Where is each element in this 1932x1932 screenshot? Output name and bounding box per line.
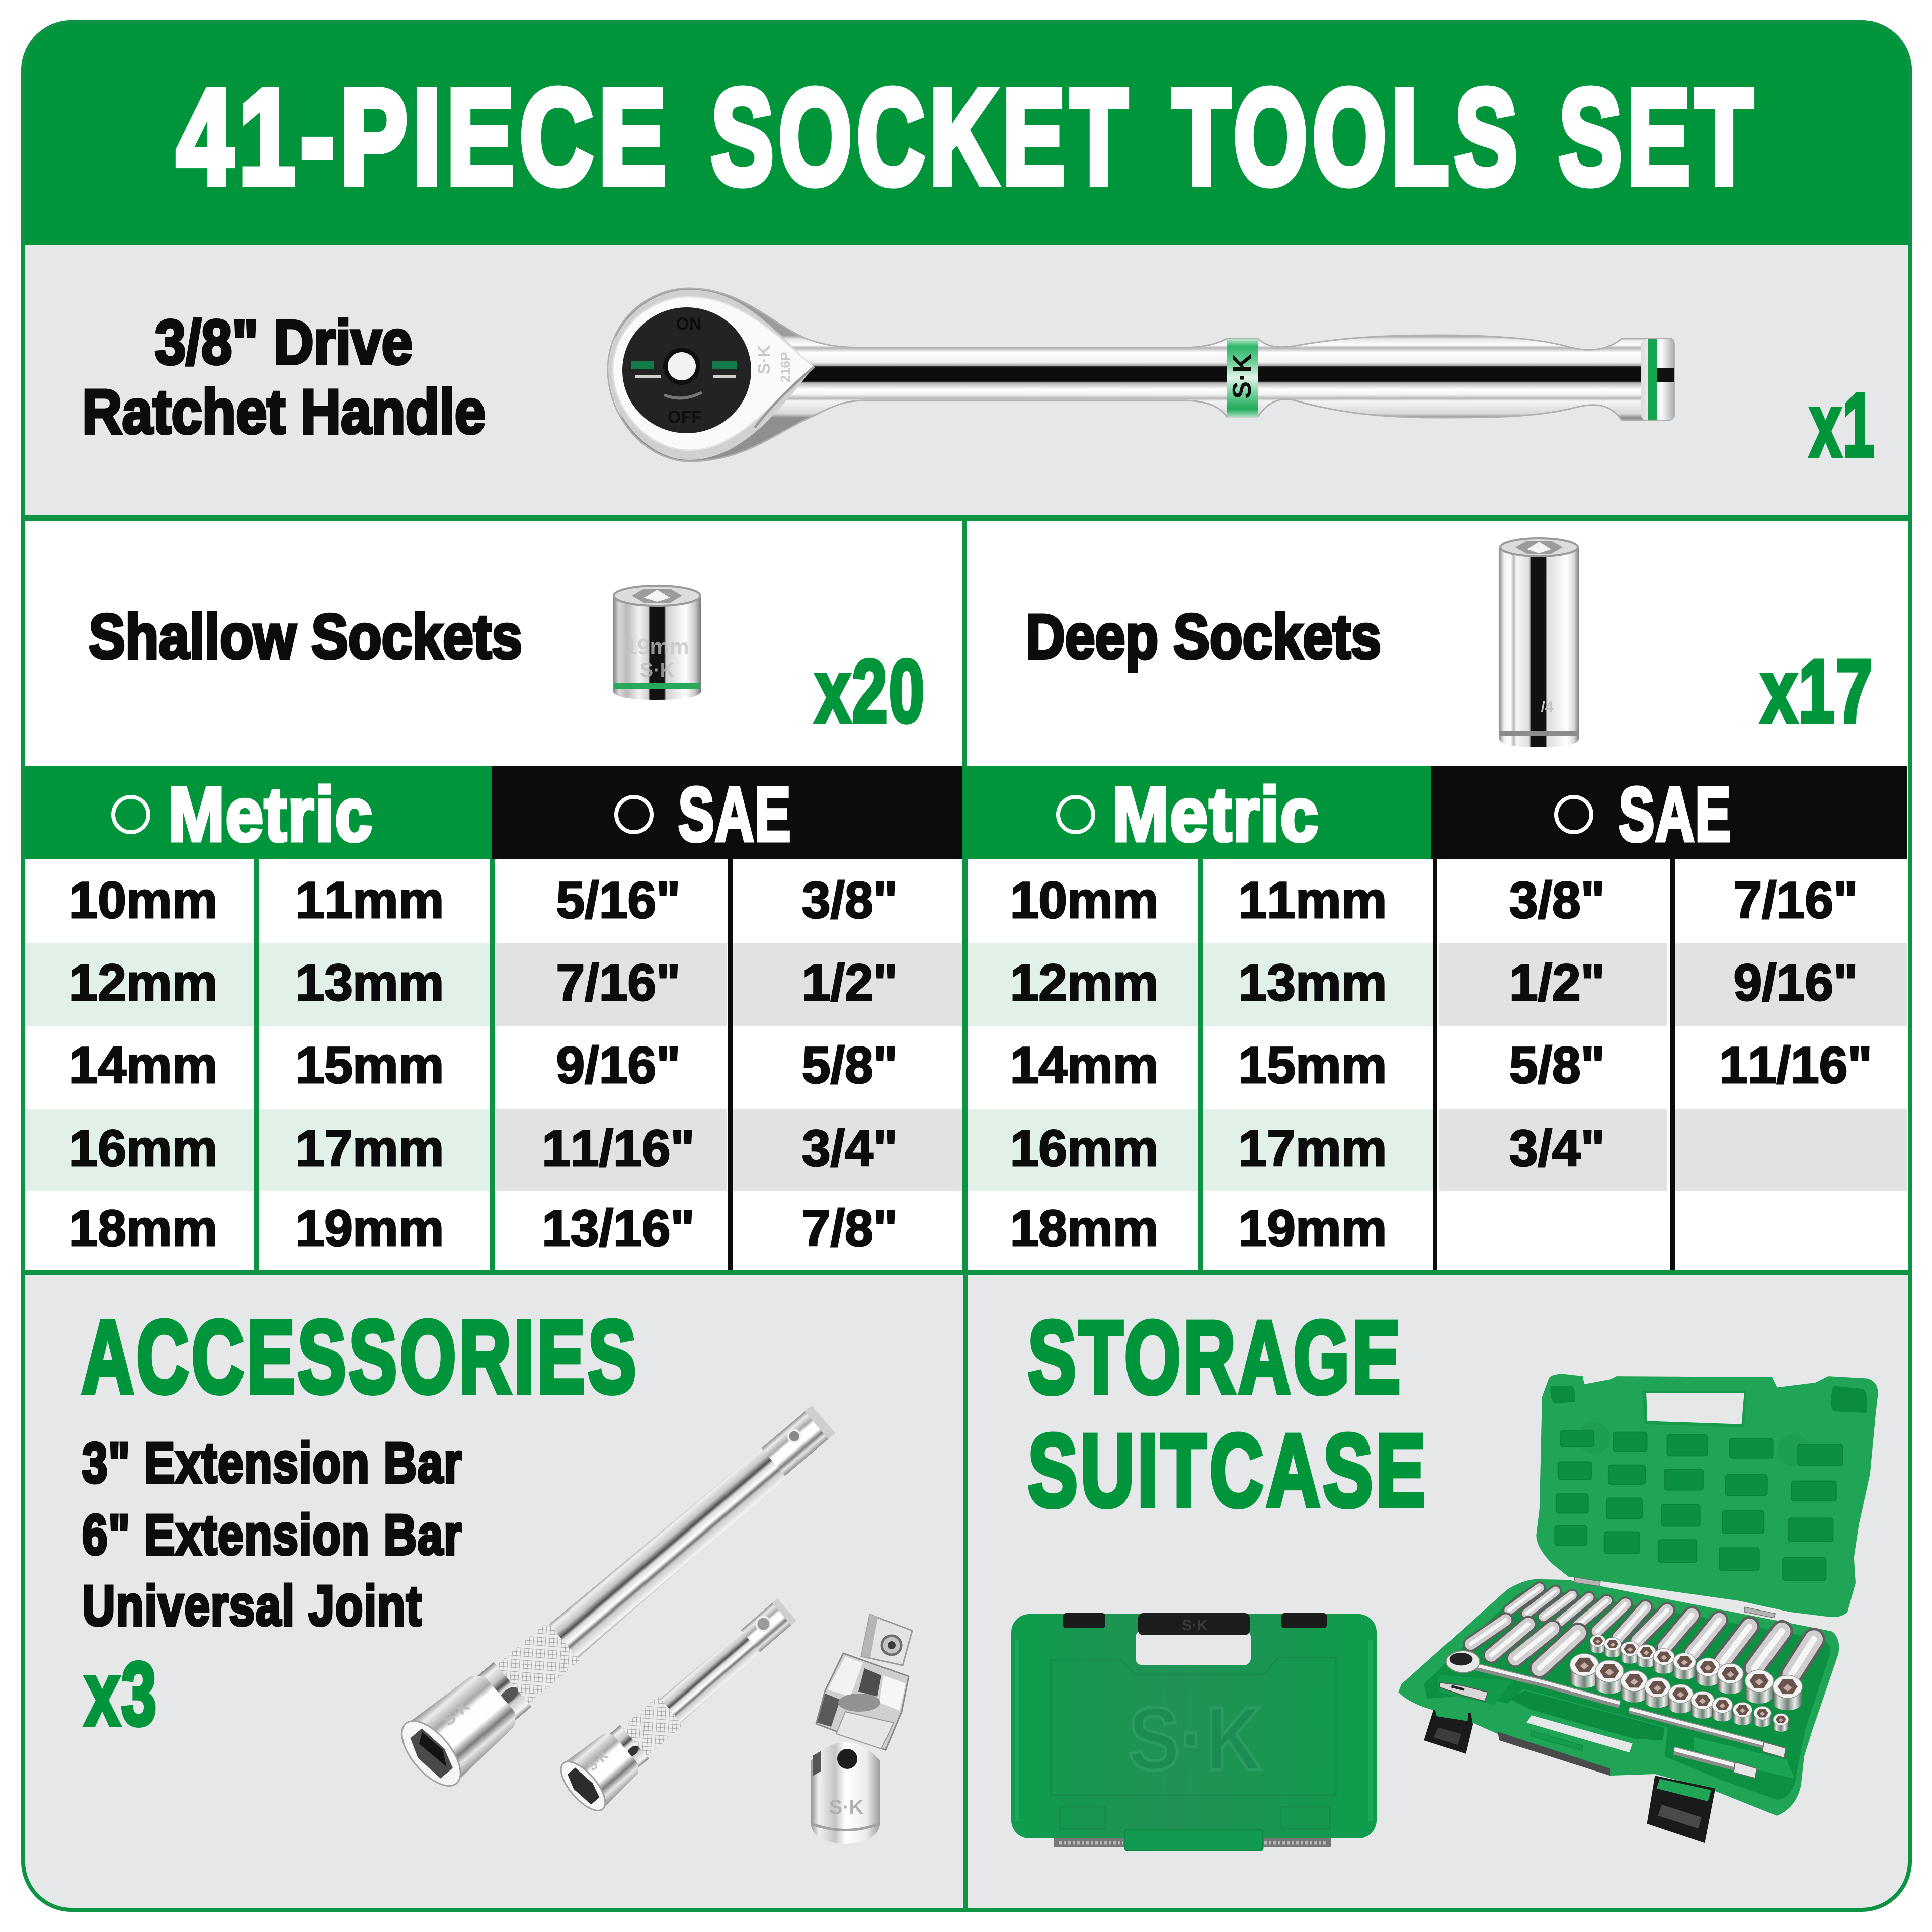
- icon: universal joint: S·K: [829, 1796, 864, 1818]
- quantity: x17: x17: [1761, 641, 1874, 741]
- icon: deep socket: /4: [1541, 699, 1554, 715]
- divider between accessories and storage: [963, 1275, 968, 1910]
- extension bar in case: [1674, 1749, 1757, 1778]
- icon: ratchet handle: 216P: [778, 352, 793, 382]
- table values: deep metric: 14mm: [1010, 1036, 1158, 1094]
- table values: deep metric: 15mm: [1239, 1036, 1387, 1094]
- table values: shallow SAE: 7/8": [802, 1199, 898, 1257]
- icon: 3 inch extension bar: S·K: [584, 1748, 611, 1774]
- panel: shallow sockets header: [89, 586, 926, 741]
- table values: shallow metric: 15mm: [296, 1036, 444, 1094]
- green rule under ratchet panel: [21, 515, 1912, 521]
- table values: deep SAE: 3/4": [1509, 1119, 1605, 1177]
- panel: deep sockets header: [1026, 538, 1874, 747]
- black latch right: [1647, 1776, 1715, 1843]
- title: SET: [1559, 61, 1758, 213]
- table column dividers: [21, 859, 1912, 1275]
- table header: shallow metric: [21, 766, 492, 859]
- title: SOCKET: [711, 61, 1133, 213]
- heading: ratchet handle: Ratchet Handle: [82, 377, 486, 447]
- icon: ratchet handle: [608, 288, 1674, 461]
- table values: deep metric: 17mm: [1239, 1119, 1387, 1177]
- title: [177, 61, 1758, 213]
- table values: shallow metric: 12mm: [69, 954, 217, 1011]
- table values: deep metric: 18mm: [1010, 1199, 1158, 1257]
- icon: shallow socket: 19mm: [625, 634, 689, 659]
- vertical divider between sockets: [962, 521, 967, 766]
- heading: deep sockets: Deep Sockets: [1026, 602, 1381, 672]
- open suitcase lid: [1536, 1374, 1878, 1617]
- table values: deep metric: [1010, 871, 1387, 1257]
- table values: deep metric: 12mm: [1010, 954, 1158, 1011]
- heading: shallow sockets: Shallow Sockets: [89, 602, 522, 672]
- quantity: x20: x20: [815, 641, 926, 741]
- table values: deep SAE: 3/8": [1509, 871, 1605, 929]
- panel: ratchet background: [21, 245, 1912, 515]
- table values: deep metric: 11mm: [1239, 871, 1387, 929]
- ratchet in case: [1446, 1651, 1786, 1758]
- table values: shallow SAE: 13/16": [542, 1199, 695, 1257]
- table header: deep metric: Metric: [1112, 772, 1319, 857]
- panel: accessories background: [21, 1275, 966, 1912]
- table values: shallow metric: 17mm: [296, 1119, 444, 1177]
- icon: 3 inch extension bar: [553, 1587, 807, 1817]
- table values: deep SAE: 5/8": [1509, 1036, 1605, 1094]
- table values: shallow SAE: 11/16": [542, 1119, 695, 1177]
- icon: shallow socket: [613, 586, 701, 700]
- title: 41-PIECE: [177, 61, 672, 213]
- table values: shallow metric: 10mm: [69, 871, 217, 929]
- accessories list: 6" Extension Bar: [82, 1503, 462, 1566]
- table header: shallow SAE: [492, 766, 962, 859]
- title: TOOLS: [1172, 61, 1522, 213]
- icon: universal joint: [811, 1615, 912, 1844]
- shallow sockets rows: [1570, 1635, 1802, 1732]
- table values: deep metric: 19mm: [1239, 1199, 1387, 1257]
- table values: shallow SAE: 5/8": [802, 1036, 898, 1094]
- table values: deep metric: 10mm: [1010, 871, 1158, 929]
- table header: deep SAE: SAE: [1619, 772, 1732, 857]
- icon: shallow socket: S·K: [640, 659, 675, 681]
- icon: closed suitcase: S·K: [1182, 1617, 1208, 1634]
- heading: storage: STORAGE: [1028, 1300, 1403, 1415]
- universal joint in case: [1440, 1682, 1488, 1701]
- table values: deep SAE: [1509, 871, 1872, 1177]
- table values: deep metric: 16mm: [1010, 1119, 1158, 1177]
- heading: suitcase: SUITCASE: [1028, 1413, 1428, 1528]
- table values: shallow SAE: 9/16": [556, 1036, 680, 1094]
- icon: ratchet handle: S·K: [755, 345, 774, 374]
- open suitcase base: [1398, 1577, 1839, 1816]
- title banner: [21, 20, 1912, 245]
- table values: shallow metric: 14mm: [69, 1036, 217, 1094]
- table values: shallow metric: 16mm: [69, 1119, 217, 1177]
- panel: storage background: [966, 1275, 1912, 1912]
- quantity: x3: x3: [85, 1644, 158, 1744]
- panel: accessories text: [82, 1300, 639, 1744]
- accessories list: [82, 1431, 462, 1637]
- table values: shallow SAE: 1/2": [802, 954, 898, 1011]
- black latch left: [1424, 1704, 1473, 1754]
- heading: accessories: ACCESSORIES: [82, 1300, 639, 1414]
- quantity: x1: x1: [1810, 375, 1876, 475]
- icon: 6 inch extension bar: S·K: [439, 1696, 474, 1730]
- icon: ratchet handle: ON: [676, 314, 701, 334]
- icon: deep socket: [1499, 538, 1579, 747]
- table header: deep metric: [962, 766, 1431, 859]
- table values: shallow metric: 13mm: [296, 954, 444, 1011]
- table values: deep SAE: 11/16": [1719, 1036, 1872, 1094]
- icon: ratchet handle: S·K: [1228, 354, 1257, 399]
- table values: shallow SAE: 5/16": [556, 871, 680, 929]
- table values: shallow SAE: 3/4": [802, 1119, 898, 1177]
- accessories list: Universal Joint: [82, 1574, 422, 1637]
- heading: ratchet handle: [82, 308, 486, 447]
- table row tints: [25, 943, 1907, 1191]
- table header: deep SAE: [1431, 766, 1907, 859]
- table values: shallow metric: 19mm: [296, 1199, 444, 1257]
- table values: shallow SAE: 3/8": [802, 871, 898, 929]
- deep sockets row: [1471, 1588, 1814, 1674]
- icon: closed suitcase: S·K: [1128, 1688, 1262, 1789]
- panel: storage text: [1028, 1300, 1428, 1528]
- table values: deep SAE: 1/2": [1509, 954, 1605, 1011]
- table values: shallow SAE: 7/16": [556, 954, 680, 1011]
- table values: deep SAE: 7/16": [1734, 871, 1858, 929]
- icon: ratchet handle: OFF: [668, 408, 702, 427]
- table values: shallow SAE: [542, 871, 898, 1257]
- icon: 6 inch extension bar: [391, 1390, 849, 1796]
- accessories list: 3" Extension Bar: [82, 1431, 462, 1494]
- table header: shallow metric: Metric: [168, 772, 373, 857]
- table values: shallow metric: 18mm: [69, 1199, 217, 1257]
- heading: ratchet handle: 3/8" Drive: [155, 308, 413, 377]
- icon: open suitcase: [1398, 1374, 1878, 1843]
- table header: shallow SAE: SAE: [678, 772, 791, 857]
- table values: deep SAE: 9/16": [1734, 954, 1858, 1011]
- table values: shallow metric: [69, 871, 444, 1257]
- icon: closed suitcase: [1011, 1613, 1377, 1850]
- table values: deep metric: 13mm: [1239, 954, 1387, 1011]
- table values: shallow metric: 11mm: [296, 871, 444, 929]
